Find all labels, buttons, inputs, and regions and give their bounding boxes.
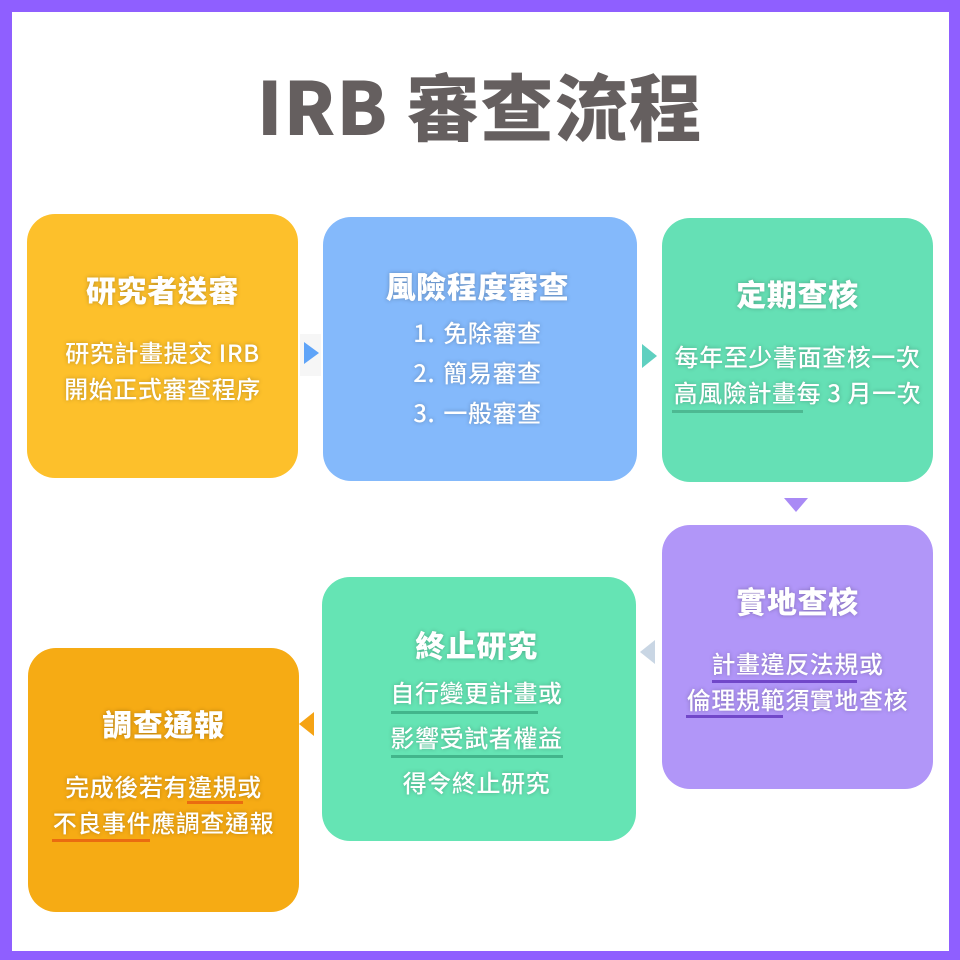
- heading: terminate study: 終止研究: [415, 622, 538, 666]
- panel: researcher submission: [27, 214, 298, 478]
- underline: rights impact: [391, 755, 563, 758]
- text: exempt review: 1. 免除審查: [413, 314, 542, 349]
- underline: adverse event: [52, 839, 150, 842]
- arrow: step 1 to step 2: [304, 342, 319, 364]
- arrow background: [300, 334, 321, 376]
- text: on-site line 1: 計畫違反法規或: [711, 645, 884, 680]
- text: audit line 2: 高風險計畫每 3 月一次: [674, 374, 921, 409]
- arrow: step 2 to step 3: [642, 344, 657, 368]
- text: terminate line 1: 自行變更計畫或: [390, 674, 563, 709]
- panel: risk level review: [323, 217, 637, 481]
- underline: high risk plan: [672, 410, 803, 413]
- underline: voluntary change: [391, 711, 538, 714]
- heading: investigate and report: 調查通報: [102, 701, 225, 745]
- text: on-site line 2: 倫理規範須實地查核: [687, 681, 908, 716]
- text: submission line 2: 開始正式審查程序: [64, 370, 261, 405]
- title: IRB 審查流程: [257, 51, 703, 157]
- panel: terminate study: [322, 577, 636, 841]
- heading: researcher submission: 研究者送審: [86, 267, 239, 311]
- text: report line 2: 不良事件應調查通報: [53, 804, 274, 839]
- panel: investigate and report: [28, 648, 299, 912]
- panel: on-site audit: [662, 525, 933, 789]
- underline: violation: [712, 680, 857, 683]
- underline: ethics: [686, 715, 783, 718]
- text: terminate line 2: 影響受試者權益: [390, 719, 563, 754]
- arrow: step 5 to step 6: [299, 712, 314, 736]
- heading: risk level review: 風險程度審查: [386, 263, 569, 307]
- text: audit line 1: 每年至少書面查核一次: [674, 338, 920, 373]
- text: report line 1: 完成後若有違規或: [65, 768, 262, 803]
- panel: periodic audit: [662, 218, 933, 482]
- arrow: step 3 to step 4: [784, 498, 808, 512]
- heading: on-site audit: 實地查核: [736, 578, 859, 622]
- text: submission line 1: 研究計畫提交 IRB: [65, 334, 260, 369]
- text: general review: 3. 一般審查: [413, 394, 542, 429]
- text: terminate line 3: 得令終止研究: [403, 764, 550, 799]
- heading: periodic audit: 定期查核: [736, 271, 859, 315]
- arrow: step 4 to step 5: [640, 640, 655, 664]
- underline: violation: [187, 801, 243, 804]
- text: expedited review: 2. 簡易審查: [413, 354, 542, 389]
